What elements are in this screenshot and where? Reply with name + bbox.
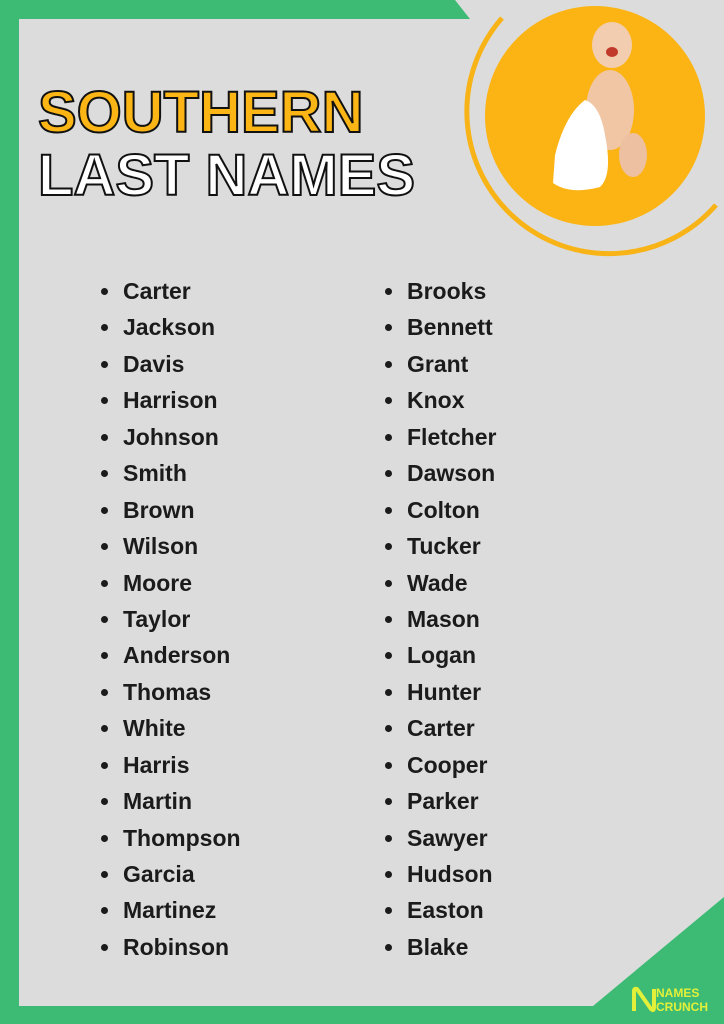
list: column 2: Mason	[407, 606, 480, 632]
list: column 2: Parker	[407, 788, 479, 814]
list: column 1: Harris	[123, 752, 189, 778]
list: column 1: Johnson	[123, 424, 219, 450]
list: column 1	[101, 278, 241, 960]
list: column 1: Thomas	[123, 679, 211, 705]
logo: NAMES	[656, 986, 699, 1000]
list: column 1: White	[123, 715, 186, 741]
list: column 2: Wade	[407, 570, 468, 596]
logo: CRUNCH	[656, 1000, 708, 1014]
list: column 1: Martin	[123, 788, 192, 814]
list: column 1: Robinson	[123, 934, 229, 960]
list: column 1: Smith	[123, 460, 187, 486]
list: column 2: Knox	[407, 387, 464, 413]
list: column 2: Fletcher	[407, 424, 496, 450]
list: column 1: Moore	[123, 570, 192, 596]
list: column 1: Taylor	[123, 606, 190, 632]
list: column 1: Brown	[123, 497, 195, 523]
list: column 1: Davis	[123, 351, 184, 377]
list: column 1: Thompson	[123, 825, 241, 851]
list: column 2: Tucker	[407, 533, 481, 559]
list: column 2: Dawson	[407, 460, 495, 486]
title: SOUTHERN	[38, 80, 363, 145]
list: column 1: Martinez	[123, 897, 216, 923]
title: LAST NAMES	[38, 143, 415, 208]
list: column 2	[385, 278, 496, 960]
list: column 2: Hunter	[407, 679, 481, 705]
list: column 2: Carter	[407, 715, 475, 741]
list: column 2: Logan	[407, 642, 476, 668]
list: column 1: Garcia	[123, 861, 195, 887]
list: column 2: Sawyer	[407, 825, 488, 851]
list: column 2: Easton	[407, 897, 484, 923]
list: column 1: Harrison	[123, 387, 218, 413]
list: column 2: Hudson	[407, 861, 493, 887]
list: column 2: Colton	[407, 497, 480, 523]
logo	[632, 986, 708, 1014]
list: column 2: Grant	[407, 351, 468, 377]
list: column 2: Blake	[407, 934, 468, 960]
title	[38, 80, 415, 208]
list: column 2: Bennett	[407, 314, 493, 340]
circle with baby	[485, 6, 705, 226]
list: column 2: Cooper	[407, 752, 488, 778]
list: column 1: Carter	[123, 278, 191, 304]
list: column 2: Brooks	[407, 278, 486, 304]
list: column 1: Jackson	[123, 314, 215, 340]
list: column 1: Anderson	[123, 642, 230, 668]
list: column 1: Wilson	[123, 533, 198, 559]
